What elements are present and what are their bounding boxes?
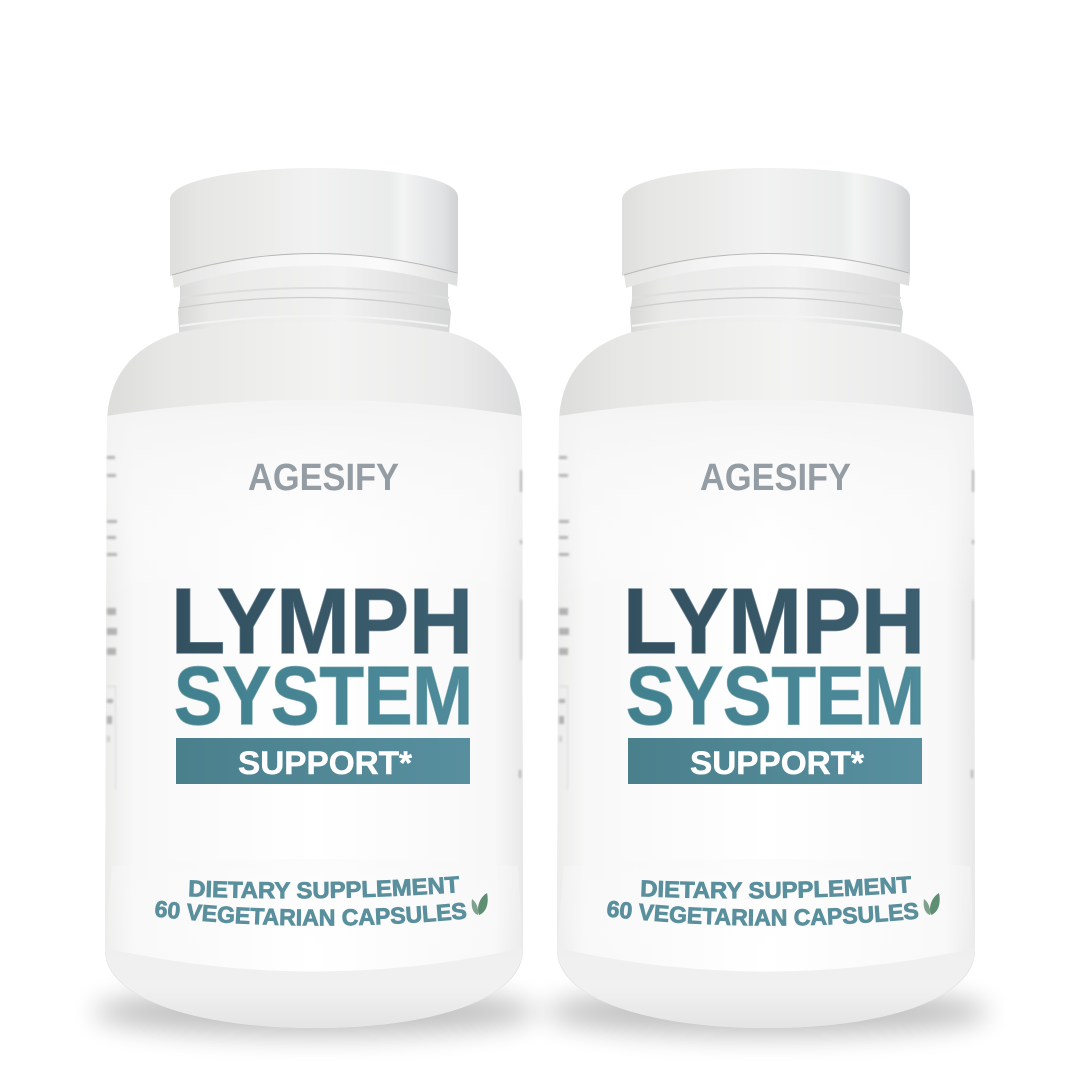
side label fine print <box>559 456 974 790</box>
support banner: SUPPORT* <box>690 745 865 781</box>
support banner: SUPPORT* <box>238 745 413 781</box>
flange below cap <box>624 253 910 288</box>
cap <box>170 168 458 276</box>
brand logo text: AGESIFY <box>248 457 399 499</box>
label upper tint <box>559 400 974 600</box>
label lower tint band <box>105 859 523 972</box>
label upper tint <box>107 400 522 600</box>
bottle body <box>557 321 975 1028</box>
icon: leaf <box>472 893 488 915</box>
label area <box>557 400 975 972</box>
title: SYSTEM: SYSTEM <box>174 649 473 742</box>
support banner <box>176 738 470 784</box>
icon: leaf <box>924 893 940 915</box>
neck <box>178 250 451 345</box>
bottle: right <box>542 168 992 1049</box>
floor shadow <box>545 988 989 1036</box>
bottom base band <box>557 948 975 1028</box>
bottom base band <box>105 948 523 1028</box>
dietary supplement line: DIETARY SUPPLEMENT <box>641 876 912 899</box>
flange below cap <box>172 253 458 288</box>
label lower tint band <box>557 859 975 972</box>
floor shadow <box>93 988 537 1036</box>
side label fine print <box>107 456 522 790</box>
neck <box>630 250 903 345</box>
bottle: left <box>90 168 541 1049</box>
title: LYMPH: LYMPH <box>171 569 473 673</box>
label area <box>105 400 523 972</box>
cap <box>622 168 910 276</box>
support banner <box>628 738 922 784</box>
brand logo text: AGESIFY <box>700 457 851 499</box>
title: SYSTEM: SYSTEM <box>626 649 925 742</box>
capsule count line: 60 VEGETARIAN CAPSULES <box>607 900 918 926</box>
capsule count line: 60 VEGETARIAN CAPSULES <box>155 900 466 926</box>
bottle body <box>105 321 523 1028</box>
title: LYMPH: LYMPH <box>623 569 925 673</box>
dietary supplement line: DIETARY SUPPLEMENT <box>189 876 460 899</box>
